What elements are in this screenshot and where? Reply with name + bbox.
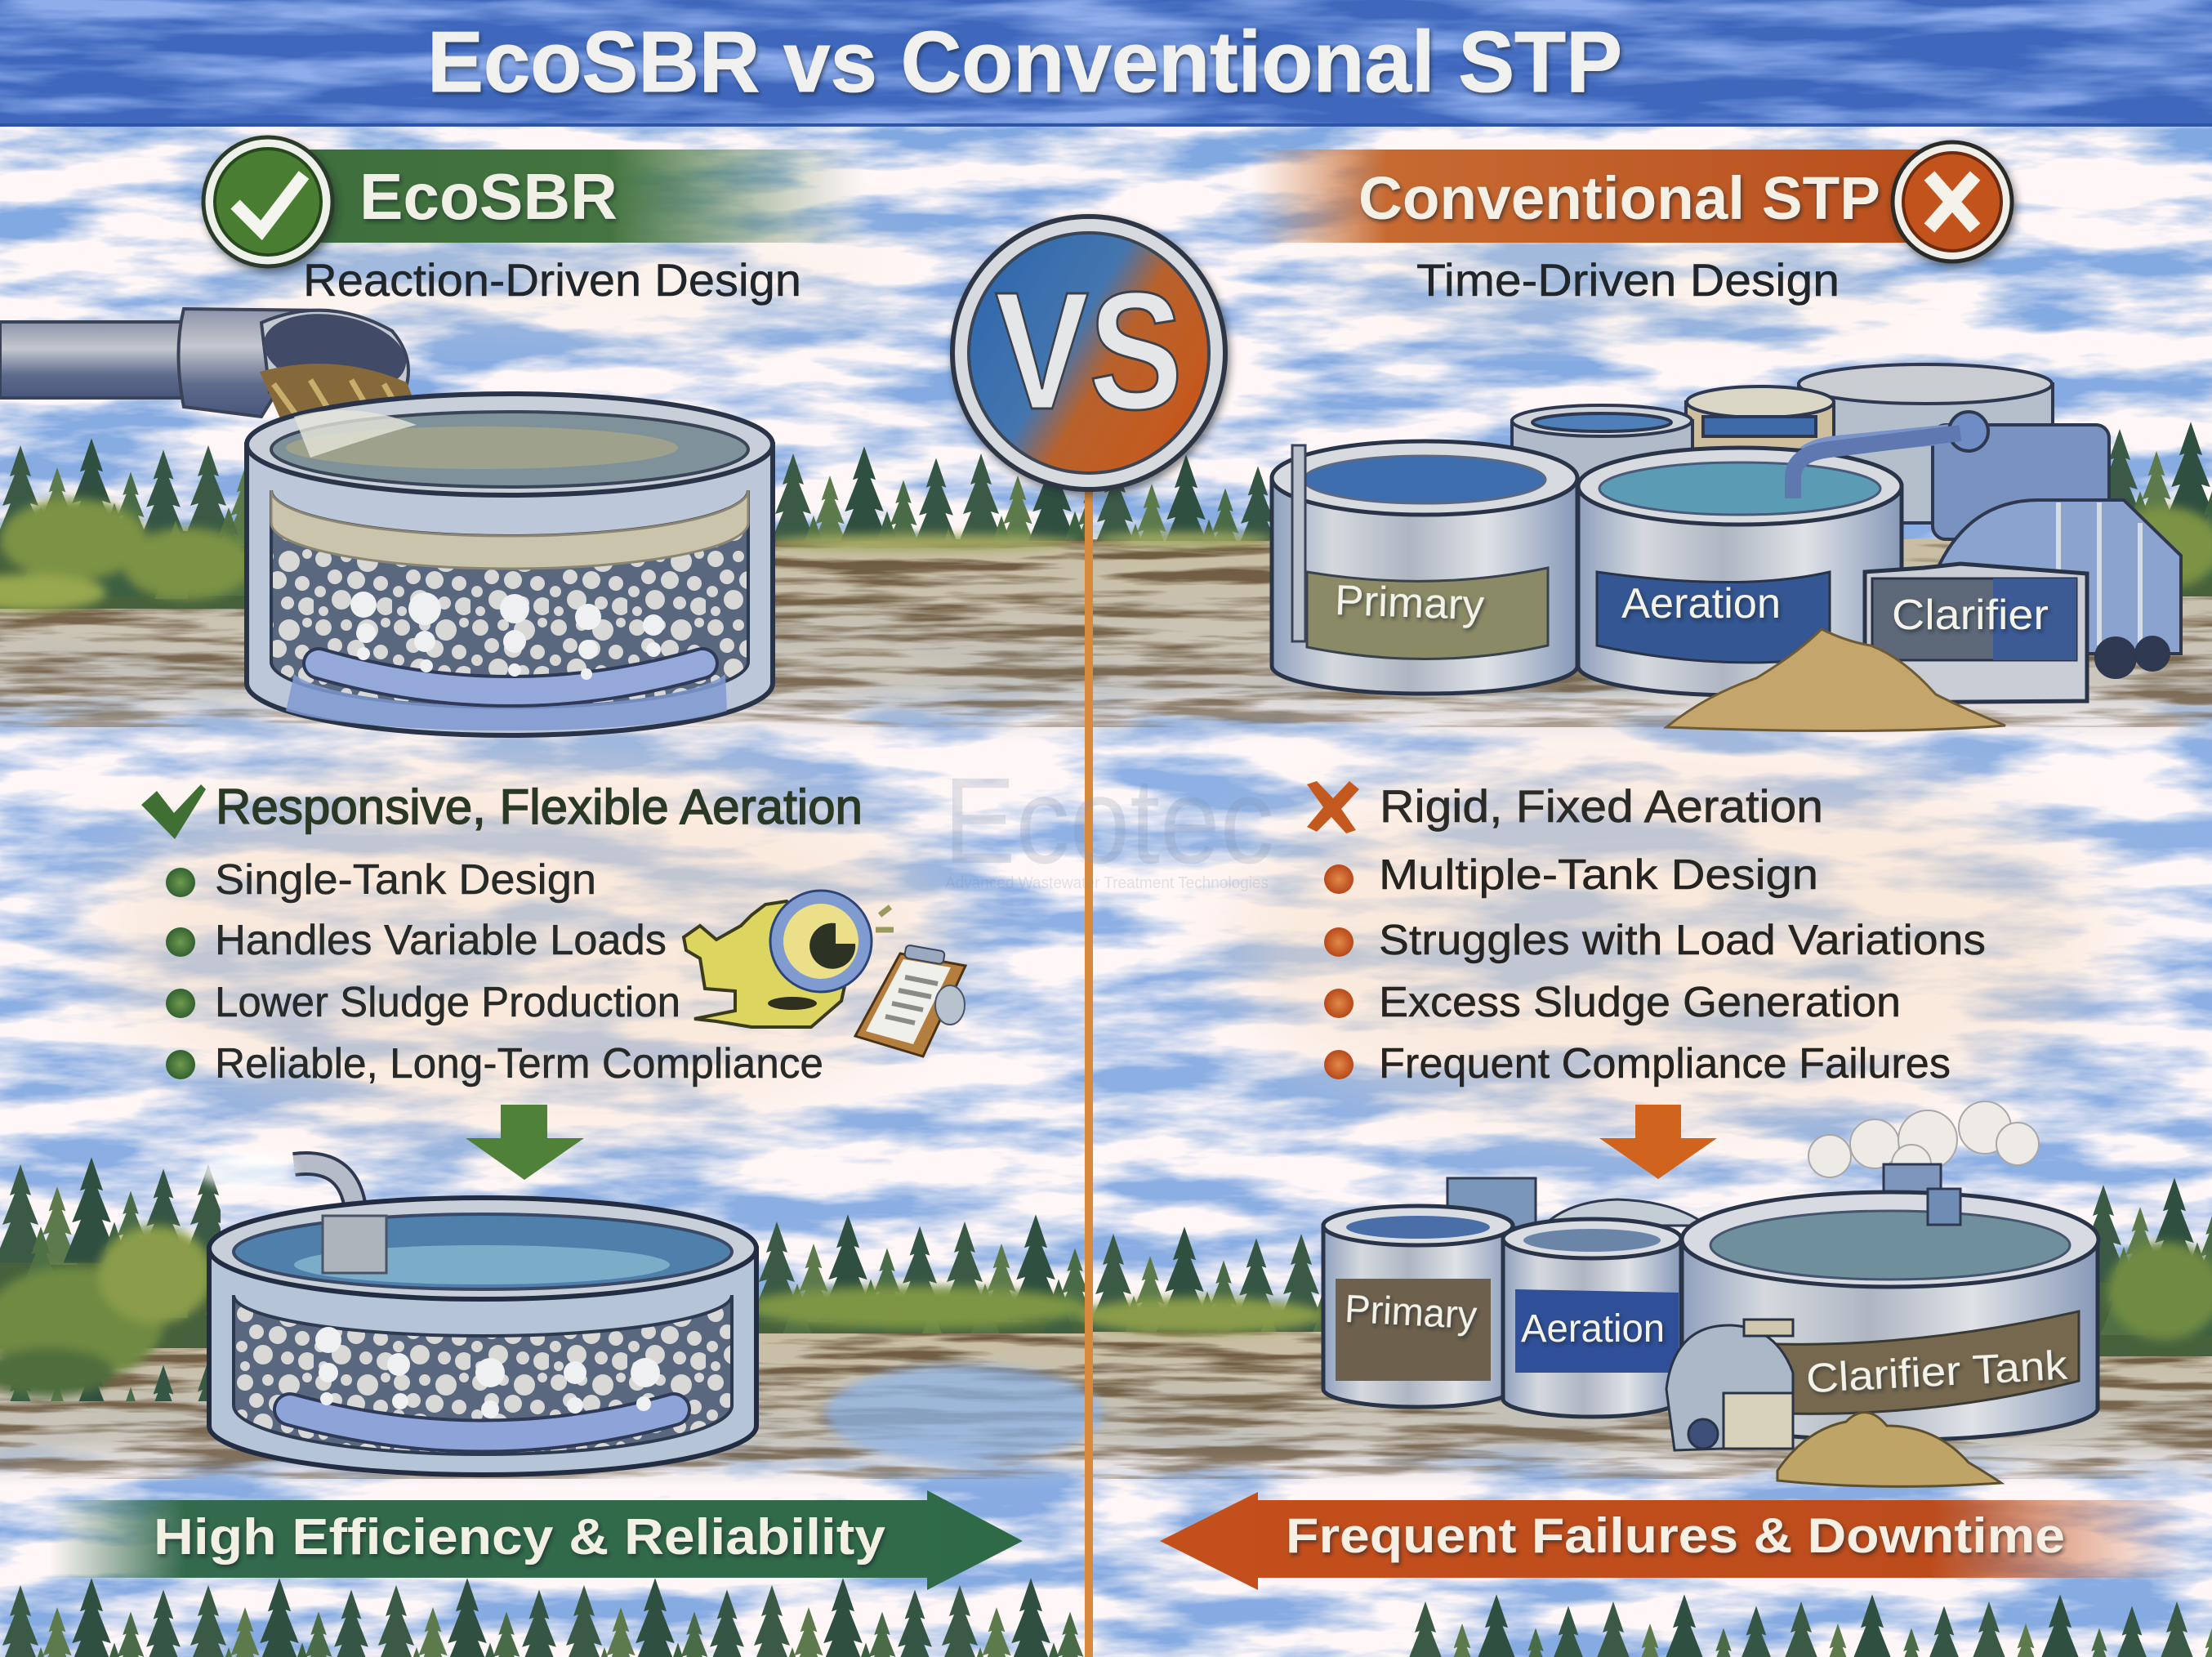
bullets	[1324, 864, 1354, 1079]
heading: Responsive, Flexible Aeration	[216, 779, 863, 834]
aeration tank	[1578, 433, 1960, 695]
bullet text: Struggles with Load Variations	[1379, 917, 1986, 964]
title band	[0, 0, 2212, 127]
center divider line	[1085, 490, 1093, 1657]
bullet text: Handles Variable Loads	[215, 917, 667, 964]
aeration tank	[1503, 1219, 1681, 1417]
tank label: Primary	[1344, 1288, 1478, 1338]
tank label: Primary	[1334, 577, 1485, 629]
bullet text: Excess Sludge Generation	[1379, 979, 1901, 1026]
rim	[209, 1198, 756, 1299]
arrow: green down	[466, 1105, 584, 1180]
banner arrow: Frequent Failures & Downtime: Frequent Failures & Downtime	[1286, 1508, 2065, 1563]
title: EcoSBR vs Conventional STP	[427, 14, 1622, 110]
icon: orange cross	[1307, 781, 1359, 833]
bullet text: Lower Sludge Production	[215, 979, 680, 1026]
bullet text: Single-Tank Design	[215, 856, 596, 904]
tree lines: upper	[0, 417, 2212, 610]
icon: check badge	[203, 137, 332, 266]
left header: EcoSBR	[203, 137, 866, 266]
VS text: VS	[995, 257, 1183, 444]
illustration: conventional plant (top right)	[1272, 364, 2181, 731]
tank label: Aeration	[1621, 580, 1781, 628]
mascot: microbe with magnifier and clipboard	[684, 891, 966, 1056]
background: ground bands	[0, 539, 2212, 1487]
tank label: Aeration	[1521, 1307, 1665, 1351]
sludge pile	[1777, 1413, 2001, 1486]
clarifier tank	[1682, 1189, 2098, 1440]
bullet text	[1379, 851, 1986, 1088]
small machine	[1666, 1320, 1793, 1450]
left bullet list	[141, 779, 863, 1088]
bullets	[166, 868, 195, 1079]
clipboard	[855, 945, 966, 1056]
tank label: Clarifier Tank	[1805, 1342, 2069, 1401]
icon: green check	[141, 784, 206, 839]
illustration: conventional plant (bottom right)	[1323, 1101, 2098, 1486]
tree lines: bottom	[0, 1573, 2212, 1657]
clarifier box	[1865, 564, 2087, 703]
bullet text: Reliable, Long-Term Compliance	[215, 1040, 823, 1088]
bullet text: Frequent Compliance Failures	[1379, 1040, 1951, 1088]
left subtitle: Reaction-Driven Design	[303, 254, 801, 306]
right bullet list	[1307, 780, 1986, 1088]
aeration pipe and bubbles	[319, 592, 702, 691]
aeration pipe and bubbles	[290, 1327, 674, 1436]
inlet pipe	[0, 303, 425, 435]
right header: Conventional STP	[1250, 142, 2012, 261]
illustration: influent pipe and EcoSBR tank	[0, 303, 773, 735]
arrow: orange down	[1599, 1105, 1717, 1179]
icon: cross badge	[1893, 142, 2012, 261]
tank label: Clarifier	[1892, 592, 2049, 639]
watermark: Ecotec	[943, 752, 1274, 889]
background tanks	[1512, 364, 2109, 539]
primary tank	[1272, 441, 1577, 694]
illustration: treated EcoSBR tank	[196, 1152, 756, 1475]
label: Conventional STP	[1358, 164, 1880, 232]
bullet text: Multiple-Tank Design	[1379, 851, 1818, 899]
primary tank	[1323, 1206, 1513, 1407]
truck	[1936, 500, 2181, 677]
banner arrow: High Efficiency & Reliability	[49, 1490, 1023, 1590]
tree lines: lower	[0, 1152, 2212, 1401]
banner arrow: Frequent Failures & Downtime	[1160, 1492, 2189, 1590]
banner arrow: High Efficiency & Reliability: High Efficiency & Reliability	[154, 1509, 886, 1565]
bullet text	[215, 856, 823, 1088]
smoke	[1808, 1101, 2039, 1184]
VS badge	[952, 217, 1225, 489]
label: EcoSBR	[359, 160, 618, 233]
tank body	[209, 1248, 756, 1475]
spout	[196, 1152, 356, 1217]
heading: Rigid, Fixed Aeration	[1380, 780, 1823, 832]
sludge pile	[1666, 629, 2005, 731]
tank body	[247, 444, 773, 735]
rim	[247, 394, 773, 495]
watermark: Advanced Wastewater Treatment Technologies	[945, 874, 1269, 892]
back equipment	[1447, 1164, 1941, 1227]
right subtitle: Time-Driven Design	[1416, 254, 1840, 306]
